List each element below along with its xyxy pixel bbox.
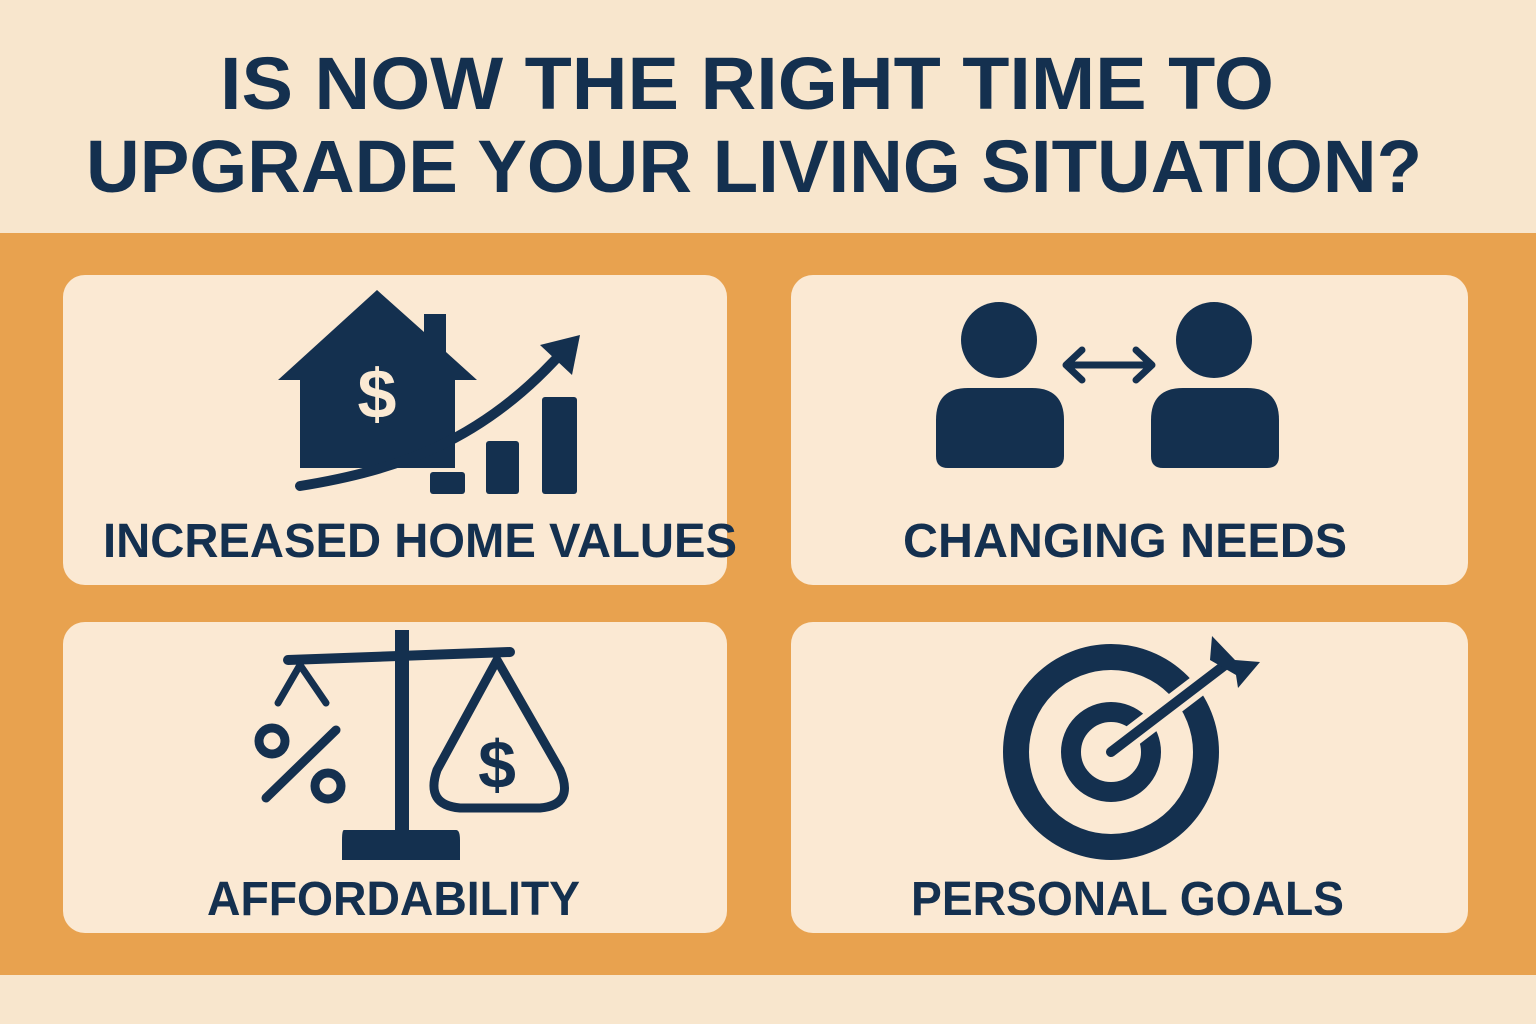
title: UPGRADE YOUR LIVING SITUATION?: [86, 125, 1422, 208]
orange band: [0, 233, 1536, 975]
panel: increased home values: [63, 275, 737, 585]
panel: affordability: [63, 622, 727, 933]
icon: house with dollar and rising chart: $: [358, 355, 396, 433]
label: AFFORDABILITY: [207, 873, 580, 926]
title: IS NOW THE RIGHT TIME TO: [220, 42, 1274, 125]
panel: changing needs: [791, 275, 1468, 585]
icon: balance scale: [259, 630, 564, 860]
icon: house with dollar and rising chart: [278, 290, 580, 494]
icon: target with arrow: [1016, 636, 1260, 847]
panel: personal goals: [791, 622, 1468, 933]
label: CHANGING NEEDS: [903, 515, 1347, 568]
icon: two people with arrows: [936, 302, 1279, 468]
label: PERSONAL GOALS: [911, 873, 1344, 926]
icon: balance scale: $: [478, 727, 516, 803]
title: [86, 42, 1422, 208]
label: INCREASED HOME VALUES: [103, 515, 737, 568]
